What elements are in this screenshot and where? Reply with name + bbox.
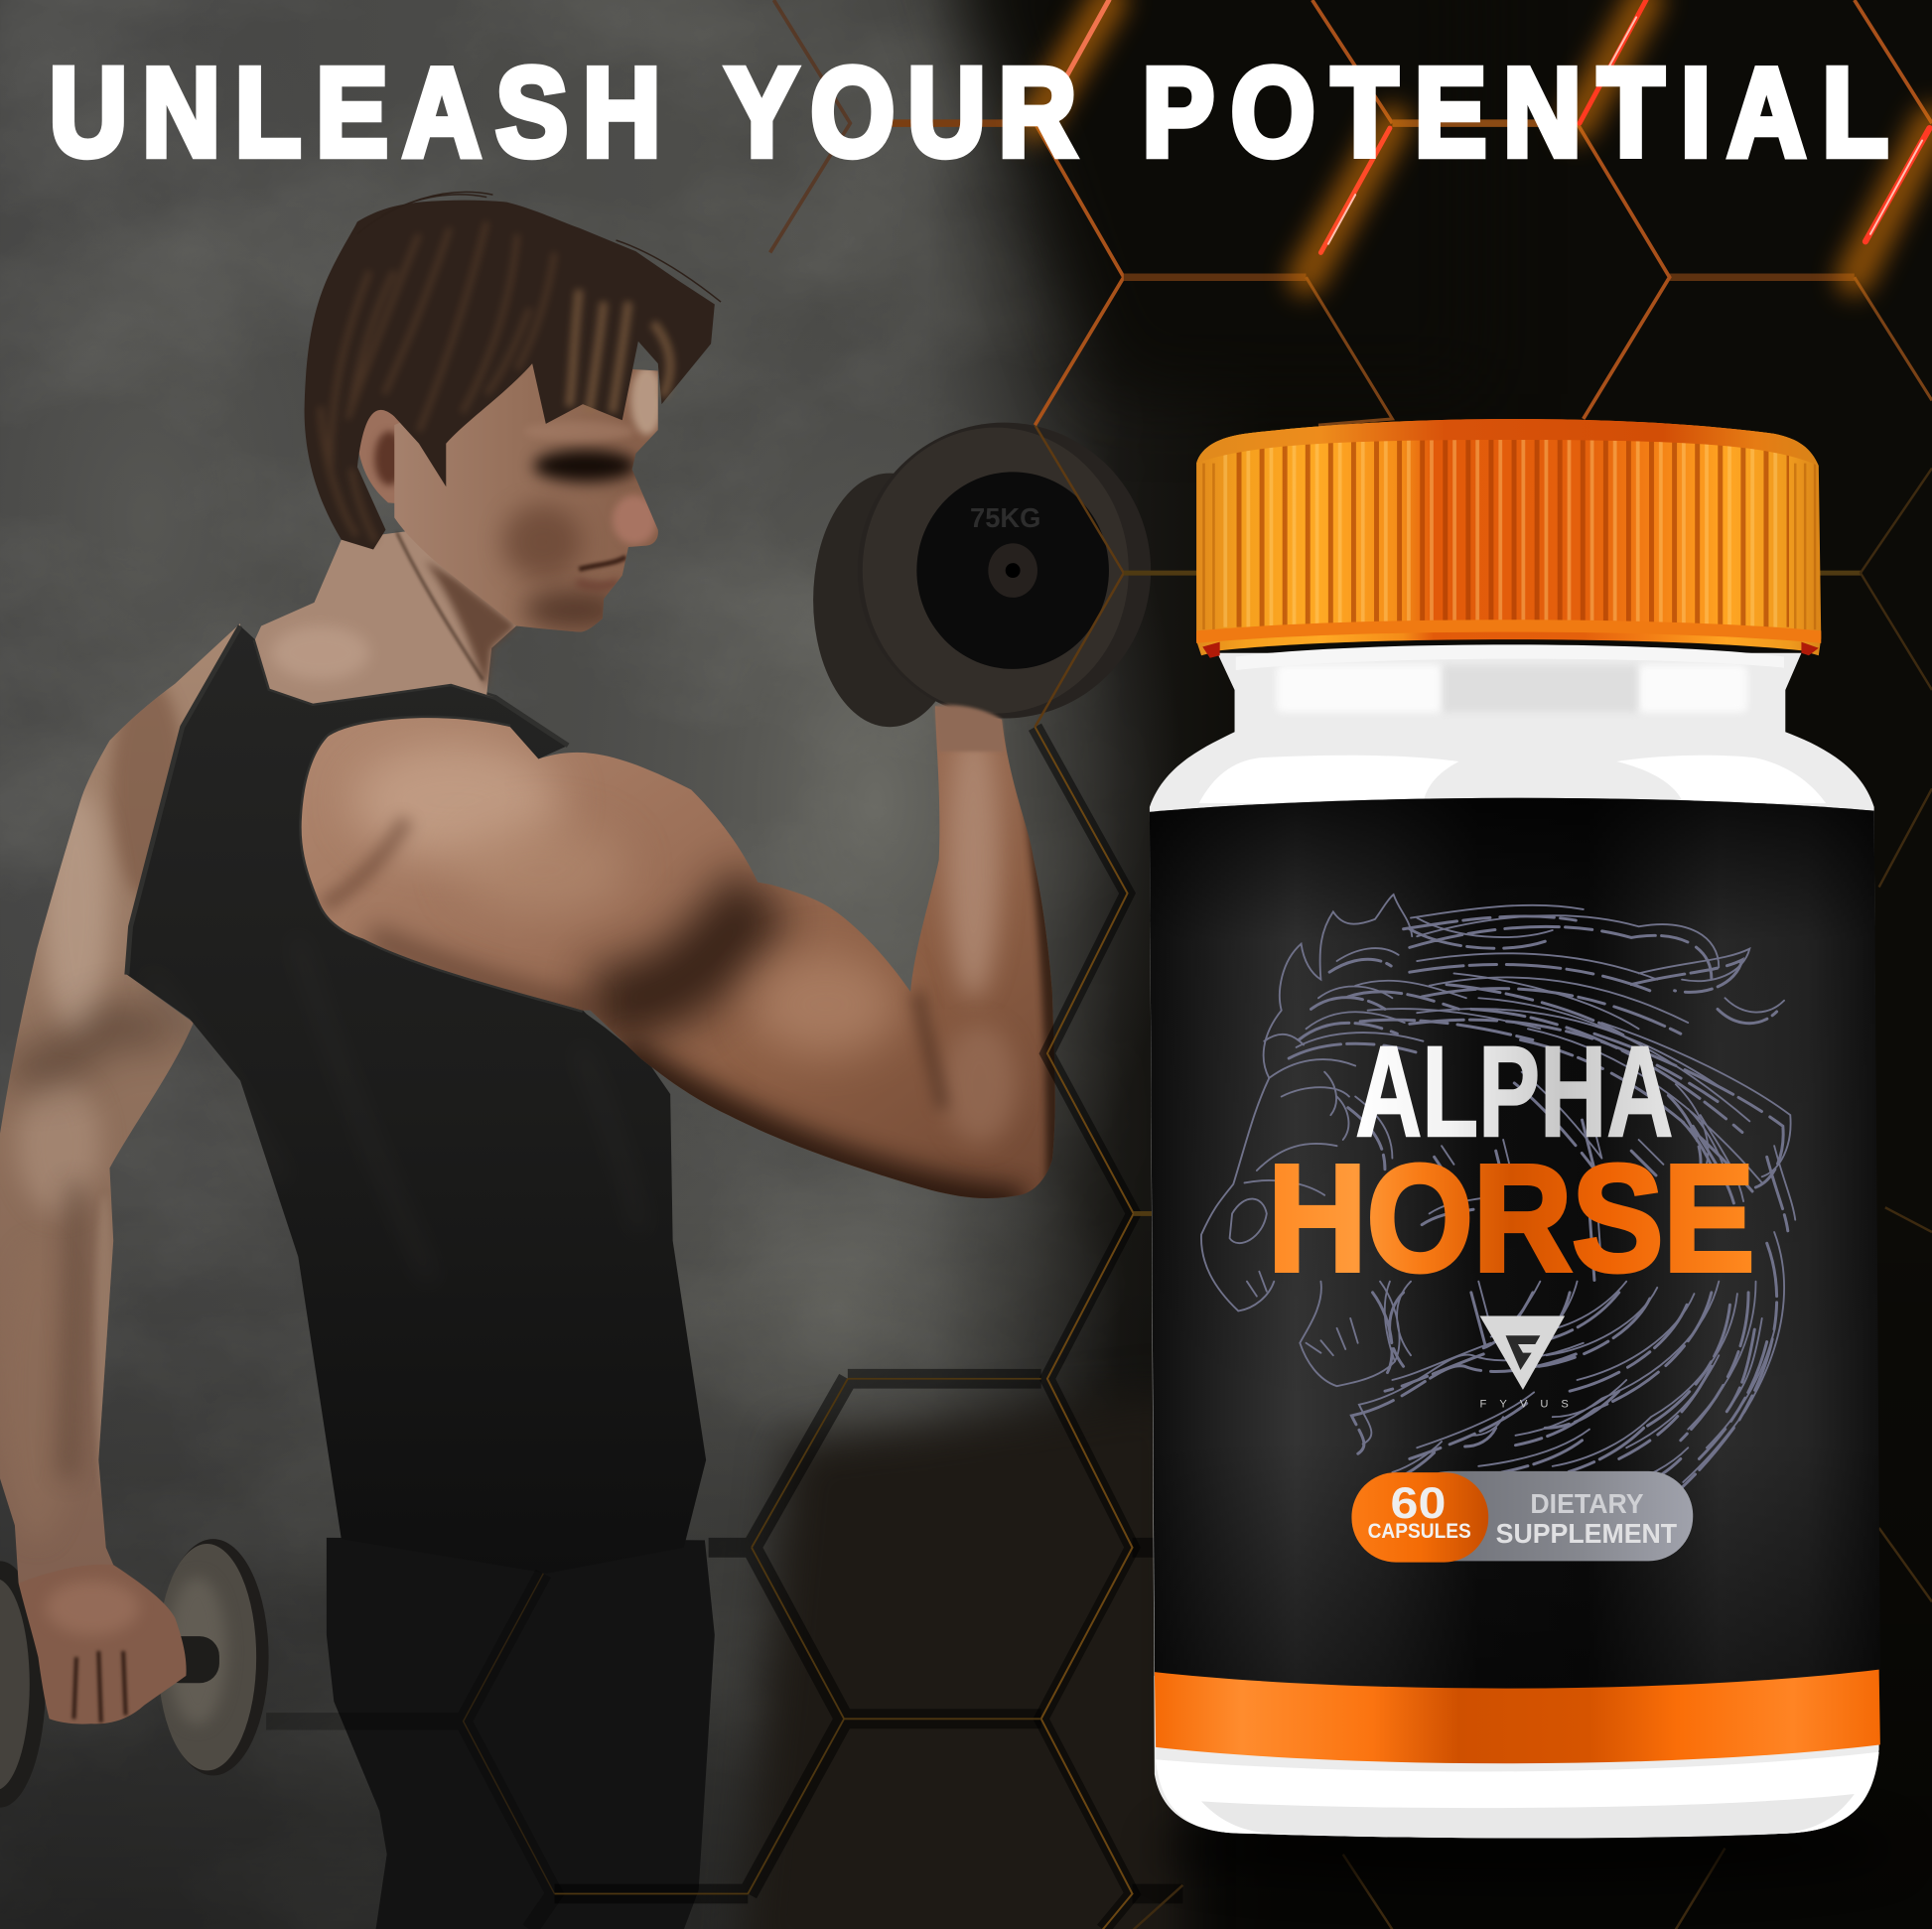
supplement bottle: [1150, 419, 1880, 1839]
shorts: [327, 1538, 715, 1929]
dark hex bands: [1035, 727, 1134, 1929]
product name ALPHA: ALPHA: [1355, 1019, 1673, 1164]
amber hex lines: [1035, 727, 1134, 1929]
orange label band: [1155, 1670, 1880, 1763]
capsule count and supplement badge: [1351, 1471, 1693, 1563]
title: YOUR: [726, 43, 1076, 183]
curling arm and shoulder: [296, 690, 1072, 1220]
title: POTENTIAL: [1142, 43, 1888, 183]
FYVUS brand logo: [1480, 1315, 1569, 1410]
athlete lifting dumbbells: [0, 192, 1151, 1929]
neck and upper back: [255, 530, 516, 704]
extra mane hatching: [1289, 916, 1788, 1496]
left dumbbell held low: [0, 1539, 269, 1808]
gripping fist: [935, 705, 1004, 752]
bottle ground shadow: [1159, 1816, 1897, 1880]
horse head outline: [1201, 895, 1412, 1386]
FYVUS wordmark: FYVUS: [1480, 1398, 1569, 1410]
orange ribbed cap: [1196, 419, 1821, 658]
rear arm: [0, 617, 246, 1601]
hair: [305, 192, 721, 550]
product name HORSE: HORSE: [1268, 1135, 1754, 1304]
tank top: [127, 625, 706, 1574]
background: smoky studio wall and dark right side: [0, 0, 1181, 1929]
bottle white plastic body: [1150, 644, 1879, 1839]
title: [50, 43, 1888, 183]
dietary text: DIETARY: [1530, 1488, 1644, 1519]
capsules text: CAPSULES: [1368, 1518, 1471, 1543]
hand gripping dumbbell: [19, 1565, 187, 1724]
horse line art illustration: [1201, 895, 1795, 1496]
ear: [357, 400, 420, 505]
horse mane strands: [1297, 905, 1795, 1484]
black label: [1150, 798, 1880, 1690]
neon glowing hexagon edges: [1035, 0, 1932, 277]
supplement text: SUPPLEMENT: [1496, 1518, 1677, 1549]
capsule count number: 60: [1391, 1479, 1446, 1528]
title: UNLEASH: [50, 43, 660, 183]
raised dumbbell weight marking: 75KG: [970, 502, 1040, 533]
raised dumbbell: [813, 423, 1151, 727]
face: [394, 363, 658, 631]
